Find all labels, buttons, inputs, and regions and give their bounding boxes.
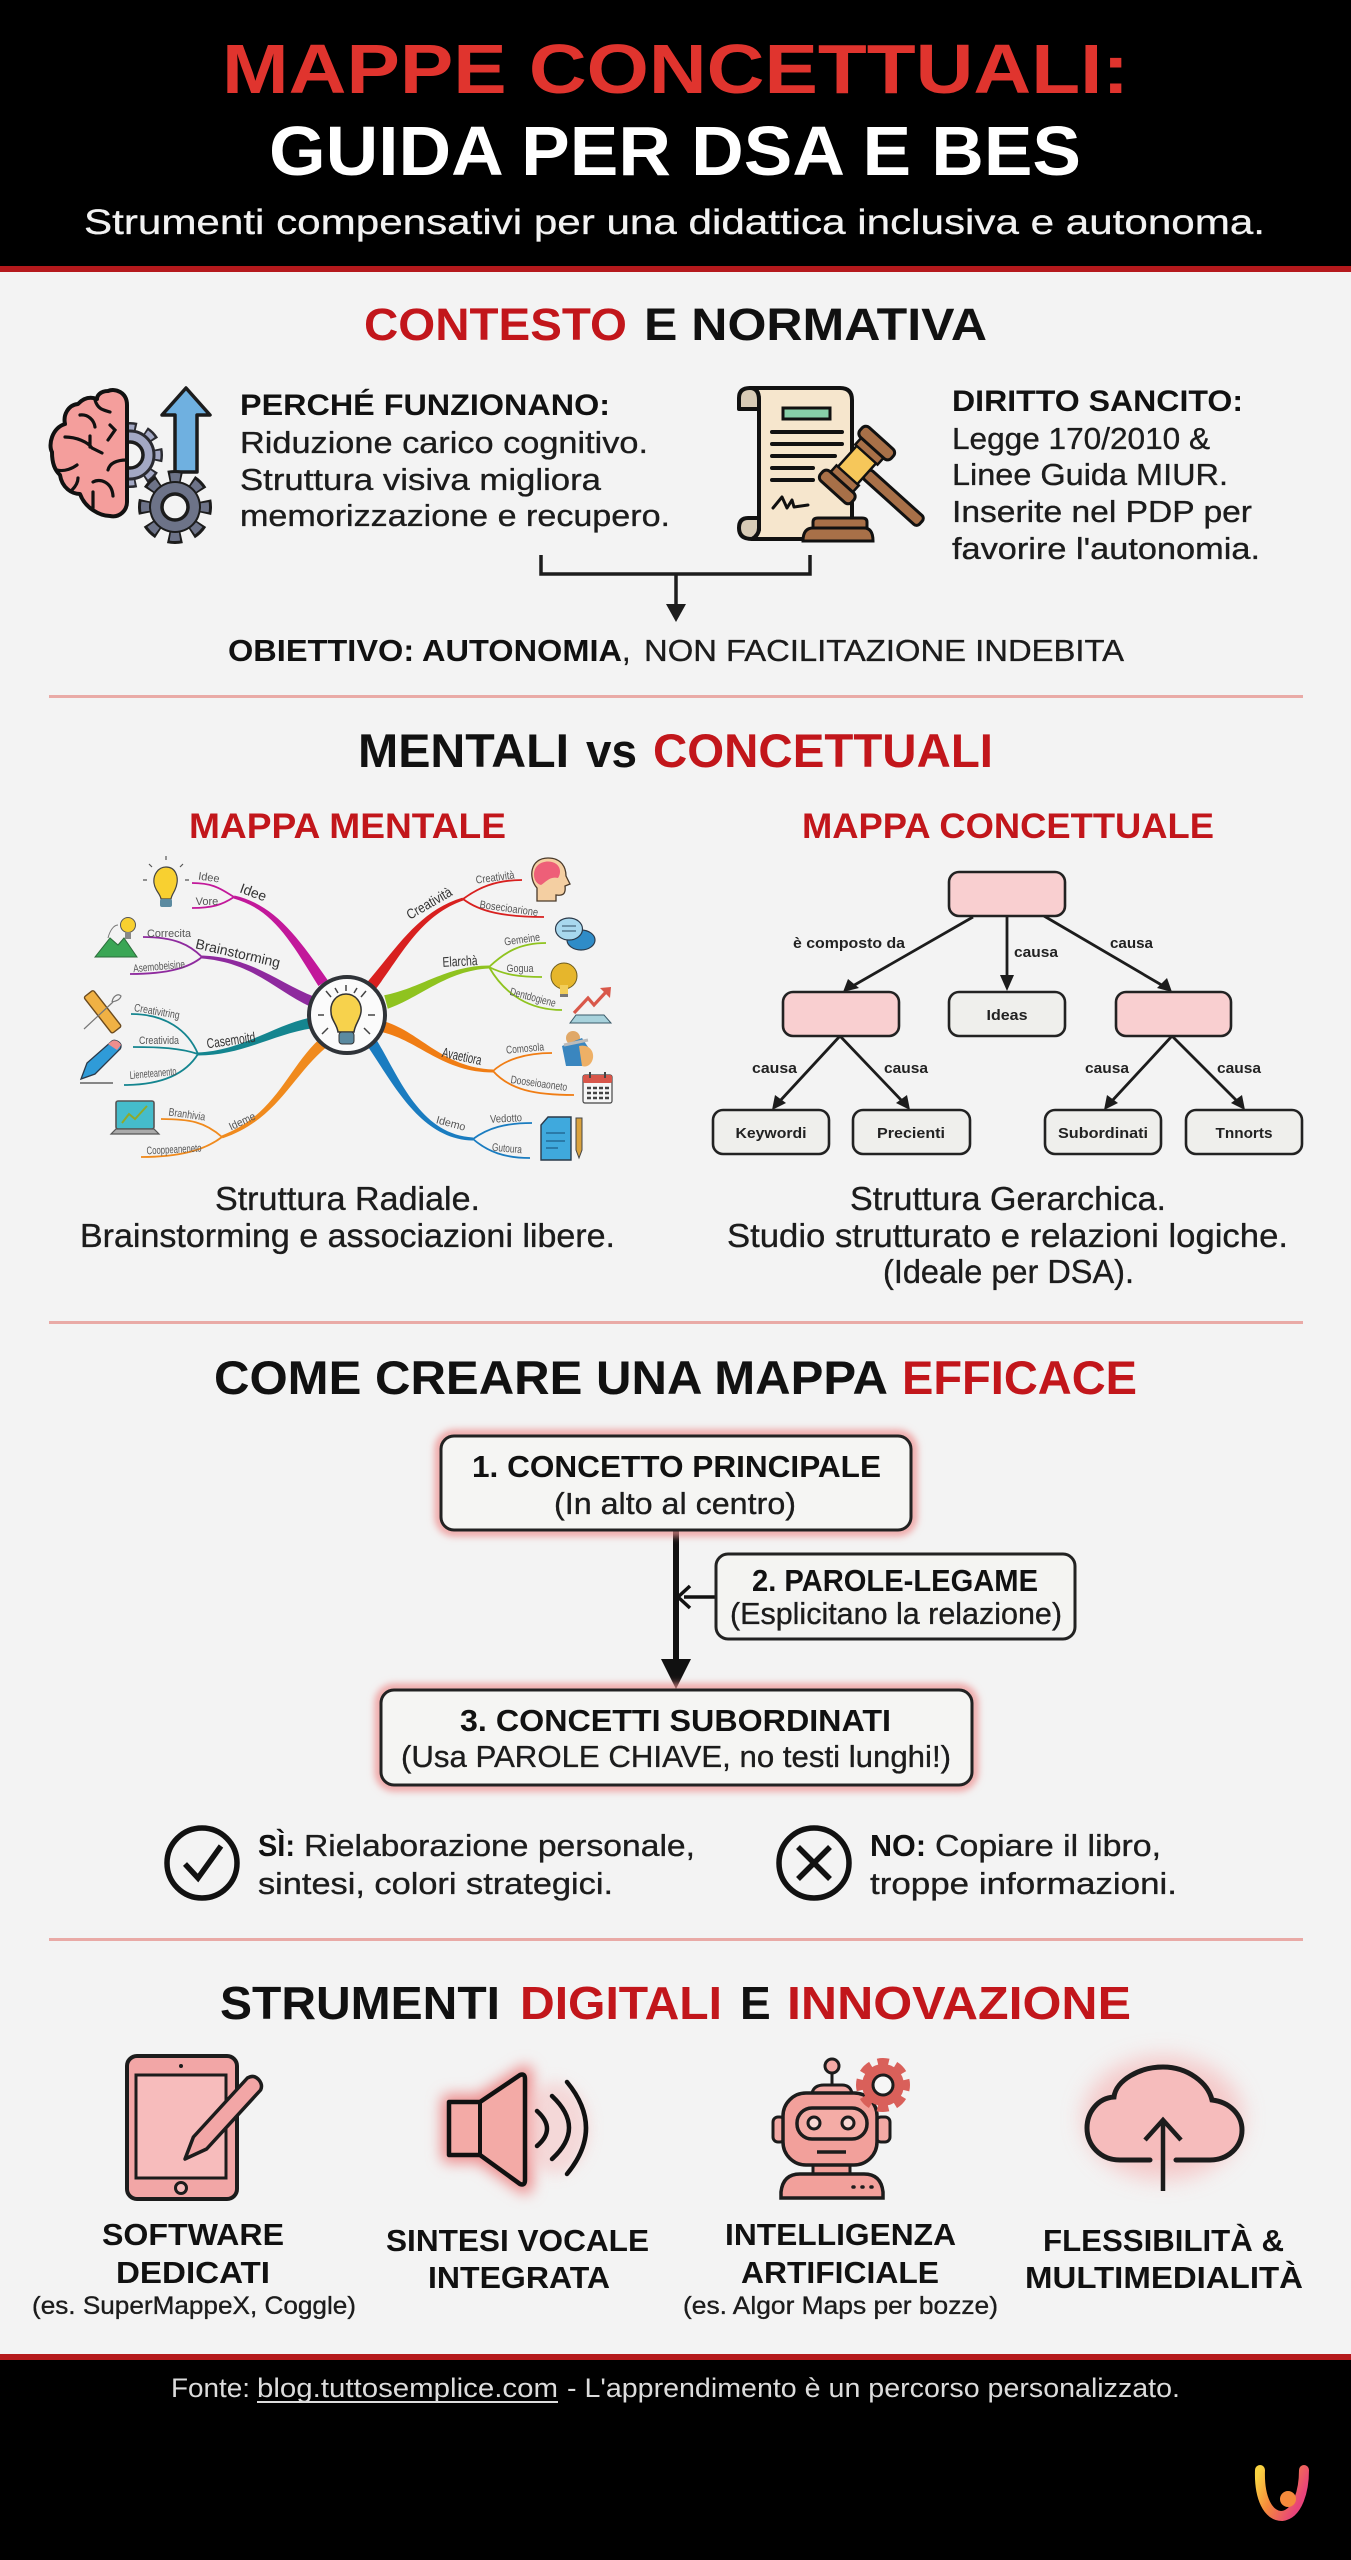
text: perché funzionano: Struttura visiva migliora xyxy=(240,462,602,497)
map labels: Vedotto xyxy=(490,1112,522,1126)
map labels: Elarchà xyxy=(442,952,478,970)
arrow: bracket to objective xyxy=(541,555,810,622)
map labels: Correcita xyxy=(147,928,192,940)
node keywordi xyxy=(713,1110,829,1154)
icon: laptop xyxy=(111,1101,159,1134)
heading: strumenti digitali e innovazione: INNOVAZIONE xyxy=(787,1977,1131,2029)
text: perché funzionano xyxy=(240,388,670,533)
text: no xyxy=(870,1828,1177,1901)
map labels: Ideme xyxy=(227,1111,258,1133)
heading: strumenti digitali e innovazione: DIGITALI xyxy=(520,1977,722,2029)
branch: magenta xyxy=(192,883,328,986)
step 2 box xyxy=(716,1554,1075,1639)
heading: contesto e normativa: E NORMATIVA xyxy=(644,299,987,350)
branch: orange left xyxy=(141,1039,327,1157)
source text xyxy=(171,2373,1180,2403)
map labels: Brainstorming xyxy=(194,935,282,971)
link labels: causa xyxy=(884,1060,929,1077)
label: intelligenza artificiale: INTELLIGENZA xyxy=(725,2217,956,2252)
heading: come creare xyxy=(214,1351,1137,1404)
title line 1: MAPPE CONCETTUALI: xyxy=(222,30,1129,108)
map labels: Branhivia xyxy=(168,1106,207,1124)
caption: mappa concettuale: Struttura Gerarchica. xyxy=(850,1180,1166,1217)
label: intelligenza artificiale: ARTIFICIALE xyxy=(741,2255,939,2290)
step 1 box xyxy=(439,1434,913,1532)
text: diritto sancito: Legge 170/2010 & xyxy=(952,421,1210,456)
icon: robot xyxy=(773,2059,904,2198)
link labels xyxy=(752,935,1262,1077)
label: software dedicati xyxy=(32,2217,356,2320)
map labels: Idee xyxy=(197,871,220,885)
branch: teal xyxy=(124,1014,312,1085)
map labels: Gemeine xyxy=(503,932,541,948)
node tnnorts xyxy=(1186,1110,1302,1154)
icon: calendar xyxy=(583,1072,612,1103)
top node xyxy=(949,872,1065,916)
text: obiettivo: NON FACILITAZIONE INDEBITA xyxy=(644,633,1124,668)
icon: check xyxy=(167,1828,237,1898)
label: sintesi vocale: INTEGRATA xyxy=(428,2260,610,2295)
branch: blue xyxy=(367,1040,532,1158)
text: diritto sancito: Inserite nel PDP per xyxy=(952,494,1252,529)
text: obiettivo xyxy=(228,633,1124,668)
heading: come creare: COME CREARE UNA MAPPA xyxy=(214,1351,888,1404)
caption: mappa mentale: Brainstorming e associazioni libere. xyxy=(80,1217,615,1254)
label: sintesi vocale xyxy=(386,2223,649,2295)
source text: - L'apprendimento è un percorso personalizzato. xyxy=(567,2373,1180,2403)
footer xyxy=(0,2354,1351,2560)
icon: gold bulb xyxy=(551,963,577,997)
heading: strumenti digitali e innovazione: STRUMENTI xyxy=(220,1977,500,2029)
step 3 box xyxy=(379,1688,974,1787)
text: diritto sancito xyxy=(952,385,1260,566)
step 1 box: (In alto al centro) xyxy=(554,1486,796,1521)
caption: mappa mentale: Struttura Radiale. xyxy=(215,1180,480,1217)
heading: mappa mentale: MAPPA MENTALE xyxy=(189,807,506,846)
heading: strumenti digitali e innovazione: E xyxy=(740,1977,771,2029)
map labels: Vore xyxy=(196,896,218,908)
text: obiettivo: OBIETTIVO: AUTONOMIA xyxy=(228,633,622,668)
heading: mentali vs concettuali: MENTALI xyxy=(358,724,569,777)
text: obiettivo: , xyxy=(622,633,631,668)
icon: scroll and gavel xyxy=(739,388,945,549)
map labels: Cooppeaneneto xyxy=(146,1143,202,1157)
node keywordi: Keywordi xyxy=(736,1125,806,1142)
source text: blog.tuttosemplice.com xyxy=(257,2373,558,2403)
heading: contesto e normativa xyxy=(364,299,987,350)
text: diritto sancito: favorire l'autonomia. xyxy=(952,531,1260,566)
node precienti xyxy=(853,1110,970,1154)
heading: mentali vs concettuali xyxy=(358,724,993,777)
icon: chat bubbles xyxy=(556,918,595,950)
text: sì: sintesi, colori strategici. xyxy=(258,1866,613,1901)
link labels: causa xyxy=(1110,935,1154,952)
heading: strumenti digitali e innovazione xyxy=(220,1977,1131,2029)
map labels: Idee xyxy=(238,880,269,904)
map labels: Idemo xyxy=(435,1114,467,1134)
label: flessibilità xyxy=(1025,2223,1303,2295)
node ideas xyxy=(949,992,1065,1036)
icon: people xyxy=(562,1031,593,1067)
map labels: Dooseioaoneto xyxy=(510,1074,568,1094)
link labels: è composto da xyxy=(793,935,906,952)
step 3 box: 3. CONCETTI SUBORDINATI xyxy=(460,1703,891,1738)
map labels: Comosola xyxy=(506,1041,545,1057)
map labels: Creativida xyxy=(139,1035,180,1047)
label: software dedicati: (es. SuperMappeX, Coggle) xyxy=(32,2292,356,2320)
text: no: troppe informazioni. xyxy=(870,1866,1177,1901)
panel: come creare una mappa efficace xyxy=(167,1351,1177,1901)
map labels: Bosecioarione xyxy=(479,899,539,919)
icon: head xyxy=(532,858,570,901)
text: diritto sancito: DIRITTO SANCITO: xyxy=(952,385,1243,418)
map labels: Avaetiora xyxy=(441,1044,483,1068)
label: flessibilità: FLESSIBILITÀ & xyxy=(1043,2223,1284,2258)
heading: come creare: EFFICACE xyxy=(902,1351,1137,1404)
heading: contesto e normativa: CONTESTO xyxy=(364,299,627,350)
text: perché funzionano: memorizzazione e recupero. xyxy=(240,498,670,533)
node left xyxy=(783,992,899,1036)
link labels: causa xyxy=(1085,1060,1130,1077)
step 1 box: 1. CONCETTO PRINCIPALE xyxy=(472,1449,881,1484)
branch: green xyxy=(384,943,562,1010)
flow arrow xyxy=(661,1530,716,1689)
caption: mappa mentale xyxy=(80,1180,615,1254)
text: perché funzionano: PERCHÉ FUNZIONANO: xyxy=(240,388,610,422)
label: software dedicati: DEDICATI xyxy=(116,2255,270,2290)
text: sì: Rielaborazione personale, xyxy=(304,1828,695,1863)
text: sì xyxy=(258,1828,695,1901)
central bulb xyxy=(309,977,385,1053)
step 2 box: 2. PAROLE-LEGAME xyxy=(752,1563,1038,1598)
icon: ruler xyxy=(84,990,122,1034)
step 2 box: (Esplicitano la relazione) xyxy=(730,1596,1062,1631)
node tnnorts: Tnnorts xyxy=(1216,1125,1272,1142)
branch: orange right xyxy=(382,1022,574,1095)
caption: mappa concettuale xyxy=(727,1180,1288,1290)
step 3 box: (Usa PAROLE CHIAVE, no testi lunghi!) xyxy=(401,1739,951,1774)
link labels: causa xyxy=(752,1060,798,1077)
label: flessibilità: MULTIMEDIALITÀ xyxy=(1025,2260,1303,2295)
map labels: Creativitring xyxy=(133,1002,181,1022)
icon: mountain and bulb xyxy=(95,918,137,957)
text: no: NO: xyxy=(870,1828,926,1863)
link labels: causa xyxy=(1217,1060,1262,1077)
map labels: Creatività xyxy=(403,883,455,922)
branch: purple xyxy=(130,937,315,1007)
label: intelligenza artificiale: (es. Algor Maps per bozze) xyxy=(683,2292,998,2320)
map labels: Dentdogiene xyxy=(508,986,557,1010)
text: sì: SÌ: xyxy=(258,1828,295,1863)
node right xyxy=(1116,992,1231,1036)
label: intelligenza artificiale xyxy=(683,2217,998,2320)
label: sintesi vocale: SINTESI VOCALE xyxy=(386,2223,649,2258)
text: perché funzionano: Riduzione carico cognitivo. xyxy=(240,425,648,460)
source text: Fonte: xyxy=(171,2373,250,2403)
arrows xyxy=(772,916,1245,1110)
map labels: Gogua xyxy=(506,963,534,975)
text: no: Copiare il libro, xyxy=(935,1828,1161,1863)
heading: mentali vs concettuali: CONCETTUALI xyxy=(653,724,993,777)
link labels: causa xyxy=(1014,944,1059,961)
icon: speaker xyxy=(449,2073,589,2186)
panel: strumenti digitali xyxy=(32,1977,1303,2320)
icon: cross xyxy=(779,1828,849,1898)
text: diritto sancito: Linee Guida MIUR. xyxy=(952,457,1228,492)
caption: mappa concettuale: (Ideale per DSA). xyxy=(883,1253,1134,1290)
chart: concept map xyxy=(713,872,1302,1154)
icon: brain, gears and arrow xyxy=(51,388,210,537)
title line 2: GUIDA PER DSA E BES xyxy=(269,112,1081,190)
map labels: Casemoitd xyxy=(206,1029,256,1051)
panel: contesto e normativa xyxy=(51,299,1260,668)
panel: mentali vs concettuali xyxy=(80,724,1302,1290)
icon: pencil xyxy=(80,1040,121,1083)
heading: mentali vs concettuali: vs xyxy=(586,724,637,777)
header band xyxy=(0,0,1351,272)
icon: bulb xyxy=(143,856,189,907)
heading: mappa concettuale: MAPPA CONCETTUALE xyxy=(802,807,1214,846)
node subordinati: Subordinati xyxy=(1058,1125,1148,1142)
branch: red xyxy=(368,880,544,988)
icon: document and pencil xyxy=(541,1117,582,1160)
map labels: Creatività xyxy=(475,869,516,887)
map labels xyxy=(129,869,568,1157)
node subordinati xyxy=(1045,1110,1161,1154)
map labels: Lieneteanento xyxy=(129,1066,177,1082)
icon: cloud upload xyxy=(1083,2056,1243,2191)
node precienti: Precienti xyxy=(877,1125,945,1142)
label: software dedicati: SOFTWARE xyxy=(102,2217,284,2252)
map labels: Asemobeisine xyxy=(133,959,186,975)
icon: rising chart xyxy=(570,987,611,1023)
icon: logo xyxy=(1260,2470,1304,2516)
subtitle: Strumenti compensativi per una didattica inclusiva e autonoma. xyxy=(84,203,1265,242)
chart: mind map xyxy=(80,856,612,1160)
node ideas: Ideas xyxy=(986,1007,1028,1024)
caption: mappa concettuale: Studio strutturato e relazioni logiche. xyxy=(727,1217,1288,1254)
icon: tablet and pen xyxy=(127,2056,262,2199)
map labels: Gutoura xyxy=(491,1142,523,1156)
